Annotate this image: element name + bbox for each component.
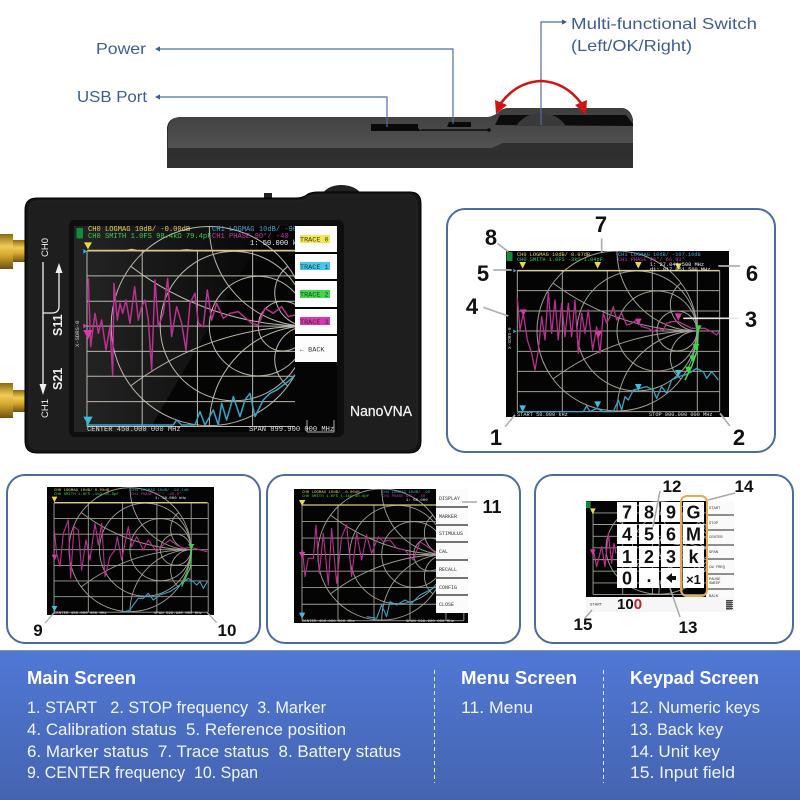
legend: menu screen [461, 668, 577, 717]
magenta markers [520, 309, 682, 338]
panel: main screen [447, 209, 775, 452]
channel markings: CH0 [40, 238, 51, 257]
channel markings [40, 238, 65, 418]
arrow: red wheel rotation [495, 81, 587, 115]
screen [47, 487, 214, 615]
menu area grid stubs [307, 420, 334, 432]
legend: main screen: 6. Marker status 7. Trace status 8. Battery status [27, 742, 401, 761]
callout: Multi-functional Switch [541, 16, 757, 125]
Smith chart [302, 489, 464, 621]
icon: back arrow [666, 573, 676, 583]
menu column: MARKER [439, 514, 457, 520]
traces [483, 238, 740, 427]
legend: main screen: Main Screen [27, 668, 136, 688]
callout numbers: 5 [477, 261, 489, 286]
trace [586, 501, 616, 567]
status text: CH1 PHASE 90°/ -40 [212, 232, 289, 241]
keypad: M [686, 524, 701, 544]
callout numbers: 6 [746, 261, 758, 286]
cyan markers [519, 370, 682, 412]
status text [517, 252, 713, 418]
side menu: START [709, 507, 721, 511]
screen [506, 251, 729, 417]
status text: CH0 LOGMAG 10dB/ -0.00dB [302, 490, 360, 495]
callout numbers: 1 [490, 425, 502, 450]
status text: CH0 LOGMAG 10dB/ 0.07dB [517, 252, 590, 258]
callout: USB Port: USB Port [77, 89, 148, 106]
keypad: G [686, 502, 701, 522]
callout: Multi-functional Switch: Multi-functional Switch [571, 16, 757, 33]
status text: CH1 LOGMAG 10dB/ -90 [382, 490, 431, 495]
yellow markers [519, 262, 682, 270]
keypad: 3 [666, 547, 676, 567]
menu buttons: TRACE 1 [300, 264, 329, 272]
menu buttons: ← BACK [300, 346, 325, 354]
menu column: STIMULUS [439, 531, 463, 537]
keypad: 8 [644, 502, 654, 522]
USB port opening [371, 124, 421, 131]
panel: center frequency view: 10 [218, 621, 236, 640]
status text: SPAN 599.900 000 MHz [154, 612, 203, 616]
callout numbers: 9 [33, 621, 43, 640]
menu column: CONFIG [439, 585, 457, 591]
device side view [167, 108, 633, 168]
knob and switch [322, 185, 362, 195]
status text: CH1 PHASE 90°/ 66.91° [618, 257, 685, 263]
screen [294, 489, 468, 623]
callouts: 15 [574, 615, 592, 634]
legend: keypad screen [630, 668, 760, 782]
callouts [574, 477, 754, 637]
traces [45, 497, 217, 623]
callout: Power [96, 41, 453, 124]
Smith chart [592, 501, 706, 595]
menu column: RECALL [439, 567, 457, 573]
SMA connector CH1 [0, 383, 26, 418]
menu column: DISPLAY [439, 496, 460, 502]
status text: START 50.000 kHz [517, 412, 568, 418]
keypad: ×1 [686, 572, 701, 587]
panel: keypad screen [535, 475, 793, 643]
menu column [436, 489, 468, 613]
callout: USB Port [77, 89, 387, 127]
status text: STOP 900.000 000 MHz [649, 412, 713, 418]
callout 11 [462, 497, 502, 517]
channel markings: S11 [51, 314, 65, 336]
traces [299, 500, 436, 619]
case [25, 192, 421, 453]
status text: 1: 50.000 [406, 499, 428, 503]
battery icon [506, 252, 512, 261]
screen [74, 226, 337, 432]
callout 11: 11 [482, 497, 502, 517]
chart grid and Smith chart [86, 226, 295, 427]
legend: main screen: 9. CENTER frequency 10. Span [27, 763, 258, 782]
callout numbers: 7 [595, 212, 607, 237]
status text: SPAN 599.900 000 MHz [406, 620, 455, 624]
panel: menu screen [267, 475, 520, 643]
callouts: 13 [679, 618, 697, 637]
status text [87, 226, 334, 434]
callout: Power: Power [96, 41, 147, 58]
menu buttons: TRACE 3 [300, 319, 329, 327]
status text: 1: 50.000 kHz [155, 496, 187, 501]
brand name: NanoVNA [350, 404, 412, 420]
callout numbers: 8 [485, 225, 497, 250]
traces [83, 242, 295, 425]
legend: main screen [27, 668, 401, 782]
legend: keypad screen: 15. Input field [630, 763, 735, 782]
keypad: 4 [622, 524, 632, 544]
unit key highlight [681, 496, 707, 596]
side menu: CW FREQ [709, 566, 726, 570]
device front view: X-SDRS-0 [74, 321, 81, 347]
side menu: CENTER [709, 536, 723, 540]
status text: CH1 LOGMAG 10dB/ -107.16dB [618, 252, 701, 258]
callout numbers: 3 [745, 307, 757, 332]
device front view [0, 185, 421, 453]
Smith chart [517, 251, 720, 412]
SMA connector CH0 [0, 234, 26, 269]
battery icon [76, 228, 83, 238]
status text: CH1 PHASE 90°/ -40 [382, 494, 426, 499]
status text: SPAN 899.900 000 MHz [249, 426, 334, 434]
legend: main screen: 1. START 2. STOP frequency 3. Marker [27, 698, 326, 717]
icon: keypad grid [726, 600, 733, 610]
status text [302, 490, 455, 624]
status text: CH1 LOGMAG 10dB/ -92.1dB [131, 488, 189, 493]
keypad: 2 [644, 547, 654, 567]
callout numbers [466, 212, 758, 450]
keypad: 6 [666, 524, 676, 544]
side menu: BACK [709, 595, 719, 599]
keypad: 9 [666, 502, 676, 522]
status text: CH1 LOGMAG 10dB/ -90 [212, 226, 297, 234]
status text [54, 488, 203, 616]
panel: main screen: X-SDRS-0 [507, 327, 513, 349]
keypad: k [688, 547, 699, 567]
callout: Multi-functional Switch: (Left/OK/Right) [571, 38, 692, 55]
callout numbers: 4 [466, 294, 479, 319]
keypad [617, 502, 704, 588]
channel markings: S21 [51, 368, 65, 390]
menu buttons: TRACE 2 [300, 292, 329, 300]
status text: CH1 PHASE 90°/ -40.9° [131, 492, 181, 497]
legend band [0, 650, 800, 800]
legend: keypad screen: 13. Back key [630, 720, 723, 739]
callouts: 14 [735, 477, 754, 496]
side menu [706, 501, 734, 599]
status text: 1: 27.044 500 MHz [650, 262, 704, 268]
keypad: 1 [622, 547, 632, 567]
side menu: STOP [709, 522, 719, 526]
legend: keypad screen: Keypad Screen [630, 668, 759, 688]
legend: menu screen: 11. Menu [461, 698, 533, 717]
legend: keypad screen: 14. Unit key [630, 742, 721, 761]
status text: CH0 LOGMAG 10dB/ 0.00dB [54, 488, 110, 493]
callouts: 12 [663, 477, 681, 496]
menu column: CAL [439, 549, 448, 555]
status text: CENTER 450.000 000 MHz [54, 612, 107, 616]
menu column: CLOSE [439, 602, 454, 608]
input field: START [590, 604, 603, 608]
thumb wheel [516, 113, 566, 126]
side menu: SWEEP [709, 582, 721, 586]
bezel [69, 220, 344, 437]
input field: 100 [617, 596, 642, 613]
screen [586, 501, 734, 597]
status text: CENTER 450.000 000 MHz [302, 620, 355, 624]
channel markings: CH1 [40, 399, 51, 418]
Smith chart [54, 488, 208, 612]
legend: menu screen: Menu Screen [461, 668, 577, 688]
status text: CH0 LOGMAG 10dB/ -0.00dB [88, 226, 190, 234]
menu buttons [295, 226, 337, 362]
status text: CH0 SMITH 1.0FS -1kΩ 65.8pF [54, 492, 119, 497]
status text: 1: 50.000 kHz [250, 240, 305, 248]
panel: center frequency view [7, 475, 260, 643]
keypad: . [646, 566, 652, 586]
status text: CH0 SMITH 1.0FS 1.1kΩ 30.8pF [302, 494, 370, 499]
status text: d1: 017.051 500 MHz [650, 267, 710, 273]
legend: main screen: 4. Calibration status 5. Reference position [27, 720, 346, 739]
menu buttons: TRACE 0 [300, 236, 329, 244]
side menu: SPAN [709, 551, 718, 555]
keypad: 5 [644, 524, 654, 544]
input field [586, 596, 734, 613]
status text: CH0 SMITH 1.0FS 98.4kΩ 79.4pF [88, 233, 211, 241]
wheel opening [495, 115, 633, 126]
leader lines [483, 238, 740, 427]
keypad: 0 [622, 568, 632, 588]
status text: CENTER 450.000 000 MHz [87, 426, 181, 434]
status text: CH0 SMITH 1.0FS -3kΩ 1.04pF [517, 257, 603, 263]
legend: keypad screen: 12. Numeric keys [630, 698, 760, 717]
green markers [685, 325, 702, 373]
keypad: 7 [622, 502, 632, 522]
power switch opening [447, 122, 471, 127]
callout numbers: 2 [733, 425, 745, 450]
side menu: PAUSE [709, 578, 721, 582]
